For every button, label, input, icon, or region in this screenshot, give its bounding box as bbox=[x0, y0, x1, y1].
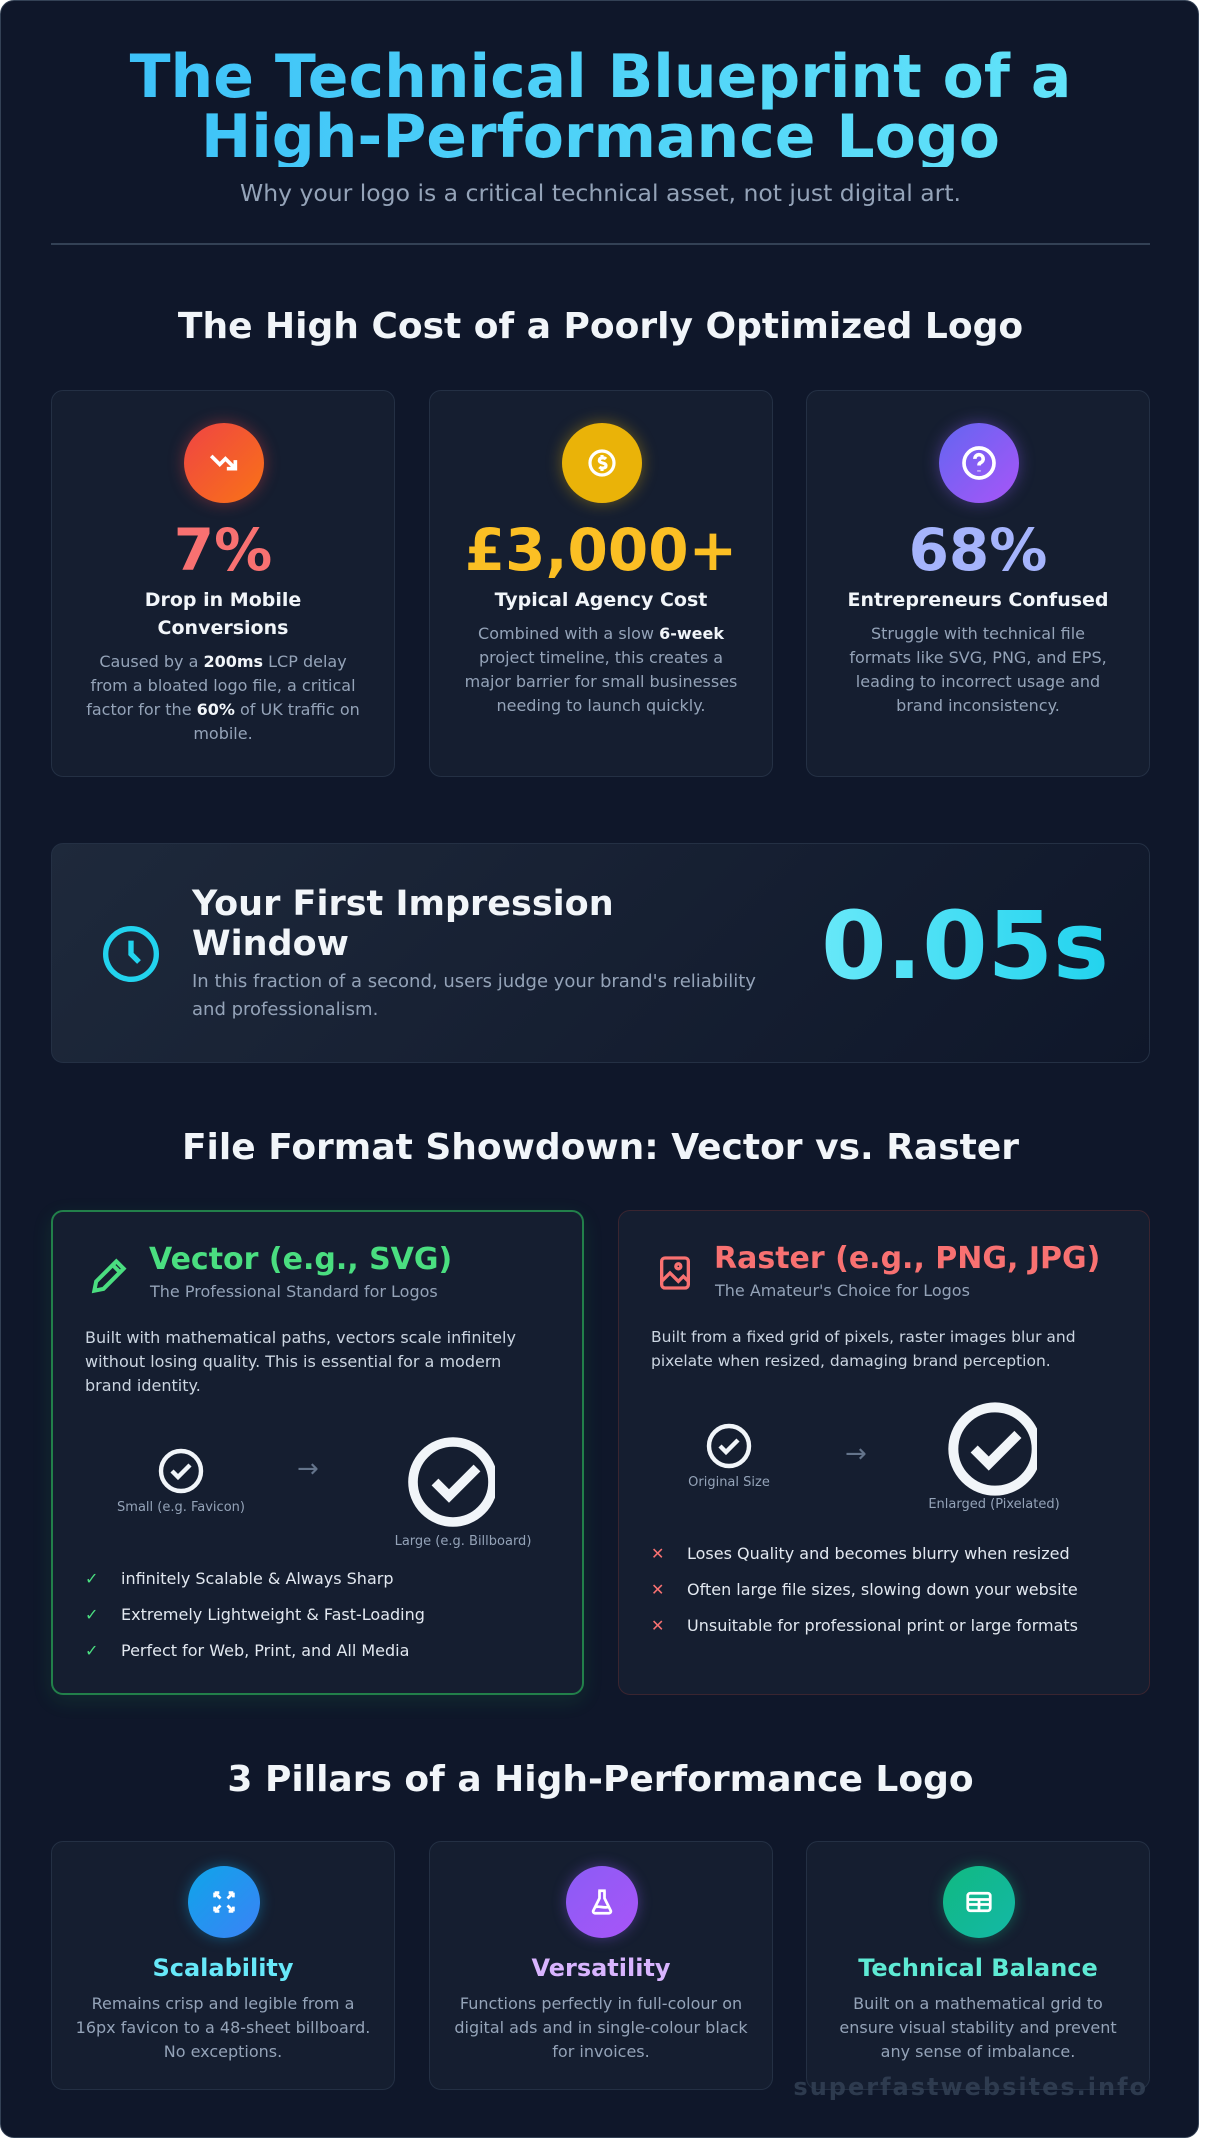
icon: coin bbox=[562, 423, 642, 503]
stat number: 7% bbox=[174, 516, 272, 584]
stat description: Combined with a slow 6-week project timeline, this creates a major barrier for small businesses needing to launch quickly. bbox=[465, 624, 737, 715]
panel: vector bbox=[51, 1210, 584, 1695]
arrow: → bbox=[845, 1439, 867, 1469]
small icon bbox=[706, 1424, 752, 1468]
pillar title: Technical Balance bbox=[858, 1954, 1098, 1982]
stat number: 68% bbox=[909, 516, 1047, 584]
impression title: Your First Impression bbox=[192, 884, 614, 924]
stat number: £3,000+ bbox=[465, 516, 737, 584]
icon: grid bbox=[943, 1866, 1015, 1938]
impression panel bbox=[51, 843, 1150, 1063]
big number: 0.05s bbox=[821, 892, 1109, 1001]
large icon bbox=[408, 1437, 495, 1527]
diagram: original to enlarged: Enlarged (Pixelated) bbox=[928, 1497, 1060, 1512]
large pixelated icon bbox=[948, 1402, 1037, 1496]
vector title: Vector (e.g., SVG) bbox=[149, 1242, 452, 1277]
raster drawbacks list: ✕ bbox=[651, 1580, 664, 1599]
pillar: balance bbox=[806, 1841, 1150, 2090]
impression text: In this fraction of a second, users judge your brand's reliability and professionalism. bbox=[192, 971, 756, 1020]
watermark: superfastwebsites.info bbox=[793, 2073, 1148, 2101]
raster drawbacks list bbox=[651, 1544, 1078, 1635]
stat description: Caused by a 200ms LCP delay from a bloated logo file, a critical factor for the 60% of UK traffic on mobile. bbox=[86, 652, 360, 743]
raster drawbacks list: Loses Quality and becomes blurry when resized bbox=[687, 1544, 1070, 1563]
heading: high cost: The High Cost of a Poorly Optimized Logo bbox=[178, 306, 1023, 347]
vector benefits list: Extremely Lightweight & Fast-Loading bbox=[121, 1605, 425, 1624]
raster description: Built from a fixed grid of pixels, raster images blur and pixelate when resized, damaging brand perception. bbox=[651, 1328, 1076, 1370]
raster drawbacks list: ✕ bbox=[651, 1544, 664, 1563]
icon: image bbox=[660, 1256, 690, 1290]
pillar title: Versatility bbox=[531, 1954, 671, 1982]
title: High-Performance Logo bbox=[201, 102, 1000, 172]
icon: expand bbox=[188, 1866, 260, 1938]
title: The Technical Blueprint of a bbox=[130, 42, 1071, 112]
icon: clock bbox=[103, 926, 159, 982]
panel: raster bbox=[618, 1210, 1150, 1695]
impression title bbox=[192, 884, 614, 964]
title bbox=[1, 47, 1200, 167]
icon: trend down bbox=[184, 423, 264, 503]
small icon bbox=[158, 1448, 204, 1494]
stat card: 68% bbox=[806, 390, 1150, 777]
arrow: → bbox=[297, 1454, 319, 1484]
diagram: small to large: Small (e.g. Favicon) bbox=[117, 1500, 245, 1515]
icon: pencil bbox=[92, 1258, 126, 1294]
pillar: scalability bbox=[51, 1841, 395, 2090]
pillar: versatility bbox=[429, 1841, 773, 2090]
heading: pillars: 3 Pillars of a High-Performance Logo bbox=[227, 1759, 974, 1800]
vector benefits list: infinitely Scalable & Always Sharp bbox=[121, 1569, 393, 1588]
heading: showdown: File Format Showdown: Vector vs. Raster bbox=[182, 1127, 1019, 1168]
vector description: Built with mathematical paths, vectors scale infinitely without losing quality. This is essential for a modern brand identity. bbox=[85, 1328, 516, 1395]
stat card: 7% bbox=[51, 390, 395, 777]
diagram: small to large: Large (e.g. Billboard) bbox=[395, 1534, 531, 1549]
stat description: Struggle with technical file formats like SVG, PNG, and EPS, leading to incorrect usage and brand inconsistency. bbox=[849, 624, 1107, 715]
icon: question bbox=[939, 423, 1019, 503]
pillar text: Remains crisp and legible from a 16px favicon to a 48-sheet billboard. No exceptions. bbox=[76, 1994, 370, 2061]
vector benefits list: ✓ bbox=[85, 1641, 98, 1660]
stat label: Entrepreneurs Confused bbox=[847, 589, 1109, 611]
vector benefits list bbox=[85, 1569, 425, 1660]
diagram: original to enlarged bbox=[688, 1402, 1060, 1512]
raster drawbacks list: Often large file sizes, slowing down your website bbox=[687, 1580, 1078, 1599]
vector benefits list: Perfect for Web, Print, and All Media bbox=[121, 1641, 409, 1660]
raster subtitle: The Amateur's Choice for Logos bbox=[715, 1281, 970, 1300]
vector benefits list: ✓ bbox=[85, 1605, 98, 1624]
diagram: original to enlarged: Original Size bbox=[688, 1475, 770, 1490]
impression title: Window bbox=[192, 924, 349, 964]
vector benefits list: ✓ bbox=[85, 1569, 98, 1588]
raster drawbacks list: ✕ bbox=[651, 1616, 664, 1635]
pillar text: Built on a mathematical grid to ensure visual stability and prevent any sense of imbalance. bbox=[839, 1994, 1117, 2061]
stat label bbox=[145, 589, 301, 639]
stat label: Typical Agency Cost bbox=[495, 589, 707, 611]
icon: flask bbox=[566, 1866, 638, 1938]
raster title: Raster (e.g., PNG, JPG) bbox=[714, 1241, 1100, 1276]
stat label: Drop in Mobile bbox=[145, 589, 301, 611]
pillar text: Functions perfectly in full-colour on digital ads and in single-colour black for invoices. bbox=[454, 1994, 748, 2061]
diagram: small to large bbox=[117, 1437, 531, 1549]
pillar title: Scalability bbox=[152, 1954, 294, 1982]
stat card: cost bbox=[429, 390, 773, 777]
subtitle: Why your logo is a critical technical asset, not just digital art. bbox=[240, 179, 961, 207]
vector subtitle: The Professional Standard for Logos bbox=[150, 1282, 438, 1301]
raster drawbacks list: Unsuitable for professional print or large formats bbox=[687, 1616, 1078, 1635]
stat label: Conversions bbox=[158, 617, 288, 639]
